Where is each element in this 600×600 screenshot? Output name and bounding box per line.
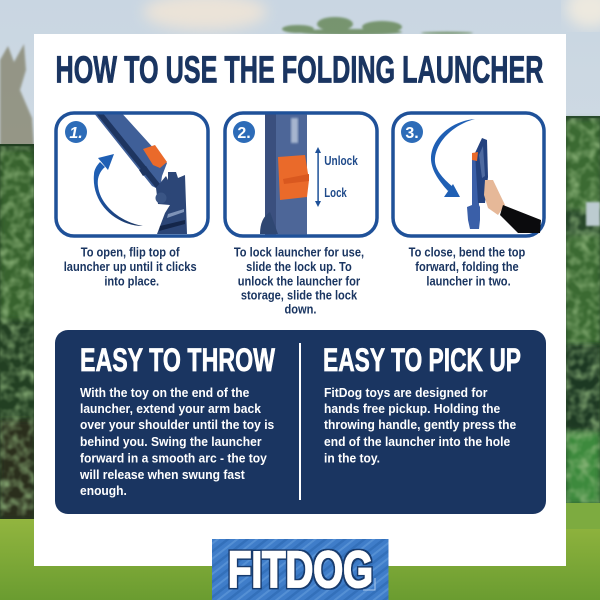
text: easy to throw: forward in a smooth arc - the toy: [80, 451, 267, 466]
text: easy to pick up: hands free pickup. Holding the: [324, 402, 500, 416]
panel: tips: [55, 330, 546, 514]
text: easy to throw: launcher, extend your arm back: [80, 402, 261, 416]
panel: step 1: [56, 113, 208, 236]
icon: hand and sleeve: [484, 180, 541, 233]
arrow: curved down: [431, 119, 475, 197]
badge: 3: [401, 121, 423, 143]
text: easy to pick up: end of the launcher into the hole: [324, 435, 510, 449]
text: easy to pick up: throwing handle, gently press the: [324, 418, 516, 432]
caption: step 3: forward, folding the: [415, 259, 519, 274]
text: easy to throw: enough.: [80, 484, 127, 498]
badge: 1: 1.: [69, 125, 83, 142]
text: easy to pick up: in the toy.: [324, 451, 380, 466]
arrow: unlock and lock: [315, 147, 321, 207]
text: easy to throw: over your shoulder until the toy is: [80, 418, 274, 432]
caption: step 2: slide the lock up. To: [246, 259, 352, 274]
caption: step 1: To open, flip top of: [81, 245, 180, 260]
icon: orange lock: [143, 145, 167, 168]
heading: easy to throw: EASY TO THROW: [80, 342, 275, 378]
caption: step 2: down.: [285, 302, 316, 317]
badge: 2: 2.: [237, 125, 251, 142]
logo: FitDog: FITDOG: [228, 541, 373, 598]
caption: step 2: storage, slide the lock: [241, 288, 358, 303]
label: lock: Lock: [324, 186, 347, 200]
icon: orange lock: [472, 152, 478, 161]
text: easy to throw: behind you. Swing the launcher: [80, 435, 262, 449]
panel: step 3: [393, 113, 544, 236]
caption: step 2: To lock launcher for use,: [234, 245, 364, 260]
caption: step 3: launcher in two.: [426, 274, 511, 288]
caption: step 2: unlock the launcher for: [238, 274, 361, 288]
text: easy to throw: With the toy on the end of the: [80, 386, 249, 400]
white card: [34, 34, 566, 566]
badge: 3: 3.: [405, 125, 419, 142]
badge: 1: [65, 121, 87, 143]
caption: step 1: into place.: [104, 274, 159, 288]
caption: step 3: To close, bend the top: [409, 245, 525, 260]
heading: easy to pick up: EASY TO PICK UP: [323, 342, 521, 378]
panel: step 2: [225, 113, 377, 236]
text: easy to throw: will release when swung fast: [79, 468, 246, 482]
label: unlock: Unlock: [324, 154, 358, 168]
caption: step 1: launcher up until it clicks: [64, 259, 197, 274]
icon: orange lock: [278, 155, 309, 200]
launcher folded open: [95, 114, 187, 234]
text: easy to pick up: FitDog toys are designed for: [324, 386, 488, 400]
badge: 2: [233, 121, 255, 143]
launcher folded: [467, 138, 488, 229]
arrow: curved up: [94, 154, 143, 226]
launcher with lock: [260, 114, 307, 234]
